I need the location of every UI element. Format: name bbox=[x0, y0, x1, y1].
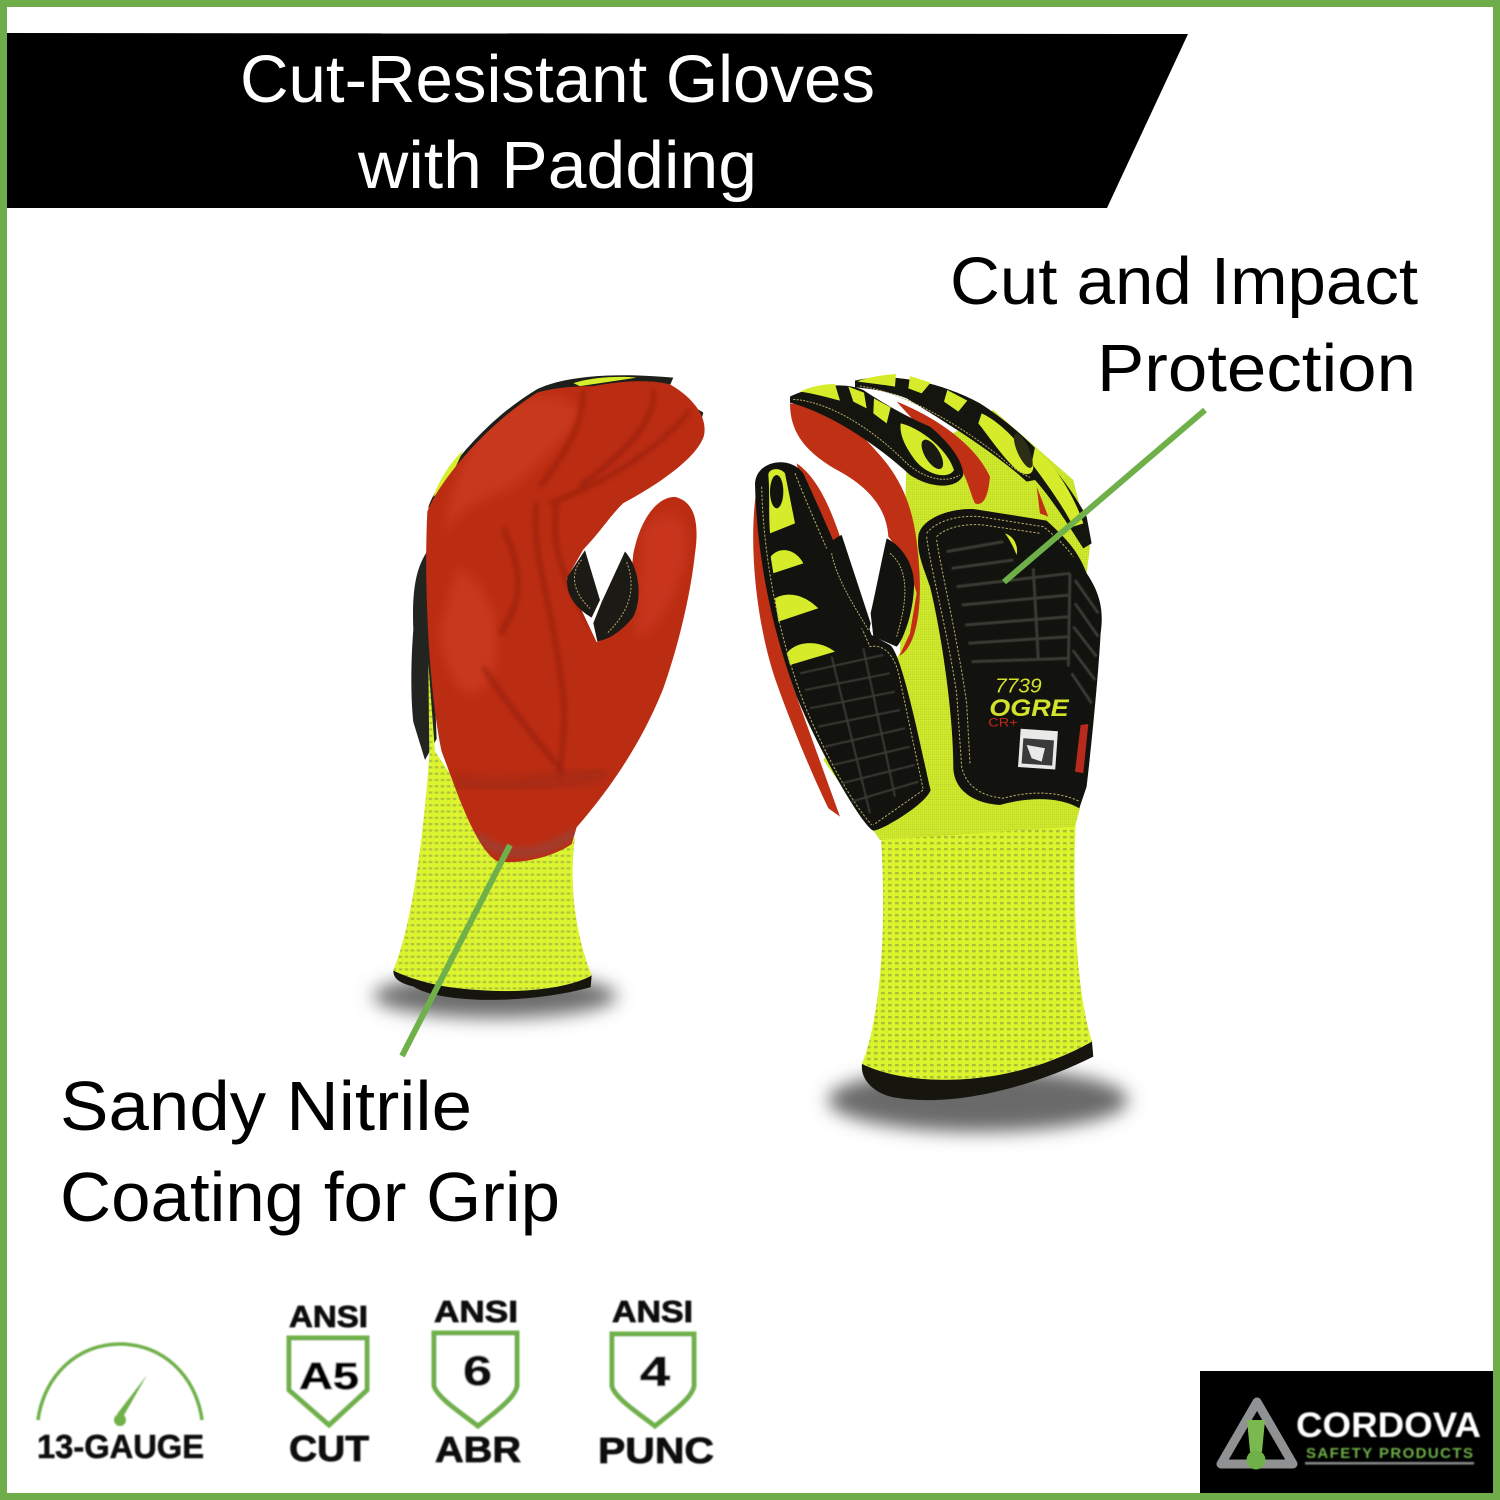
right glove: thumb pad bbox=[755, 462, 931, 831]
logo: warning triangle bbox=[1221, 1402, 1293, 1470]
right glove: model number label: CR+ bbox=[988, 716, 1018, 730]
left glove: palm shading bbox=[440, 389, 690, 853]
title text: Cut-Resistant Gloves bbox=[240, 42, 875, 117]
pointer line: cut and impact protection bbox=[1004, 410, 1205, 582]
icon: ANSI 6 abrasion badge: ANSI bbox=[434, 1294, 518, 1329]
right glove: web patches bbox=[823, 535, 914, 647]
right glove: model number label bbox=[988, 675, 1070, 730]
left glove: knit cuff bbox=[393, 663, 592, 991]
icon: ANSI 6 abrasion badge bbox=[434, 1294, 521, 1470]
callout: sandy nitrile coating bbox=[60, 1067, 560, 1236]
right glove: hand knit bbox=[823, 410, 1090, 840]
callout: cut and impact protection: Protection bbox=[1097, 331, 1416, 406]
icon: 13-gauge dial: 13-GAUGE bbox=[37, 1428, 204, 1465]
callout: sandy nitrile coating: Coating for Grip bbox=[60, 1158, 560, 1236]
left glove: palm view with red sandy nitrile coating bbox=[393, 375, 705, 1000]
right glove: model number label: OGRE bbox=[989, 695, 1070, 722]
icon: ANSI A5 cut badge bbox=[289, 1299, 369, 1469]
title text: with Padding bbox=[357, 128, 757, 203]
logo: Cordova Safety Products bbox=[1200, 1371, 1493, 1493]
icon: ANSI A5 cut badge: CUT bbox=[289, 1428, 369, 1469]
right glove: knit cuff bbox=[862, 803, 1092, 1080]
icon: ANSI 4 puncture badge: ANSI bbox=[612, 1294, 693, 1329]
icon: ANSI 6 abrasion badge: 6 bbox=[463, 1347, 492, 1394]
pointer line: sandy nitrile coating bbox=[402, 845, 510, 1056]
right glove: finger strap far bbox=[855, 374, 1092, 548]
left glove: back strap peeking above fingers bbox=[428, 375, 703, 514]
right glove: cuff binding bbox=[862, 1042, 1093, 1100]
left glove: black webbing between thumb and fingers bbox=[567, 550, 639, 641]
logo: wordmark bbox=[1296, 1406, 1481, 1464]
callout: cut and impact protection: Cut and Impact bbox=[950, 244, 1418, 319]
icon: ANSI 4 puncture badge: PUNC bbox=[598, 1430, 714, 1471]
right glove: back view with impact padding bbox=[753, 374, 1102, 1100]
right glove: red coating on fingers and thumb bbox=[753, 402, 1048, 817]
right glove: pad ribs bbox=[947, 542, 1098, 703]
right glove: finger strap near bbox=[790, 384, 963, 486]
callout: cut and impact protection bbox=[950, 244, 1418, 406]
callout: sandy nitrile coating: Sandy Nitrile bbox=[60, 1067, 472, 1145]
right glove: red side mark bbox=[1075, 724, 1088, 773]
glove shadow: left bbox=[373, 974, 617, 1018]
icon: ANSI 6 abrasion badge: ABR bbox=[435, 1429, 521, 1470]
title banner bbox=[7, 33, 1188, 208]
right glove: white certification tag bbox=[1018, 729, 1058, 770]
icon: ANSI 4 puncture badge bbox=[598, 1294, 714, 1471]
icon: ANSI 4 puncture badge: 4 bbox=[640, 1348, 671, 1395]
title text bbox=[240, 42, 875, 203]
right glove: thumb pad ribs bbox=[800, 648, 918, 813]
left glove: side pad bbox=[411, 549, 437, 760]
logo: wordmark: SAFETY PRODUCTS bbox=[1306, 1445, 1473, 1462]
right glove: model number label: 7739 bbox=[995, 675, 1042, 698]
glove shadow: right bbox=[828, 1068, 1128, 1132]
icon: ANSI A5 cut badge: A5 bbox=[299, 1356, 359, 1398]
icon: 13-gauge dial bbox=[37, 1344, 204, 1465]
icon: ANSI A5 cut badge: ANSI bbox=[289, 1299, 368, 1334]
logo: wordmark: CORDOVA bbox=[1296, 1406, 1481, 1445]
right glove: small yellow notch bbox=[1005, 533, 1017, 555]
left glove: red nitrile palm bbox=[426, 381, 705, 862]
right glove: back-of-hand impact pad bbox=[918, 509, 1102, 808]
left glove: cuff binding bbox=[393, 970, 592, 1000]
